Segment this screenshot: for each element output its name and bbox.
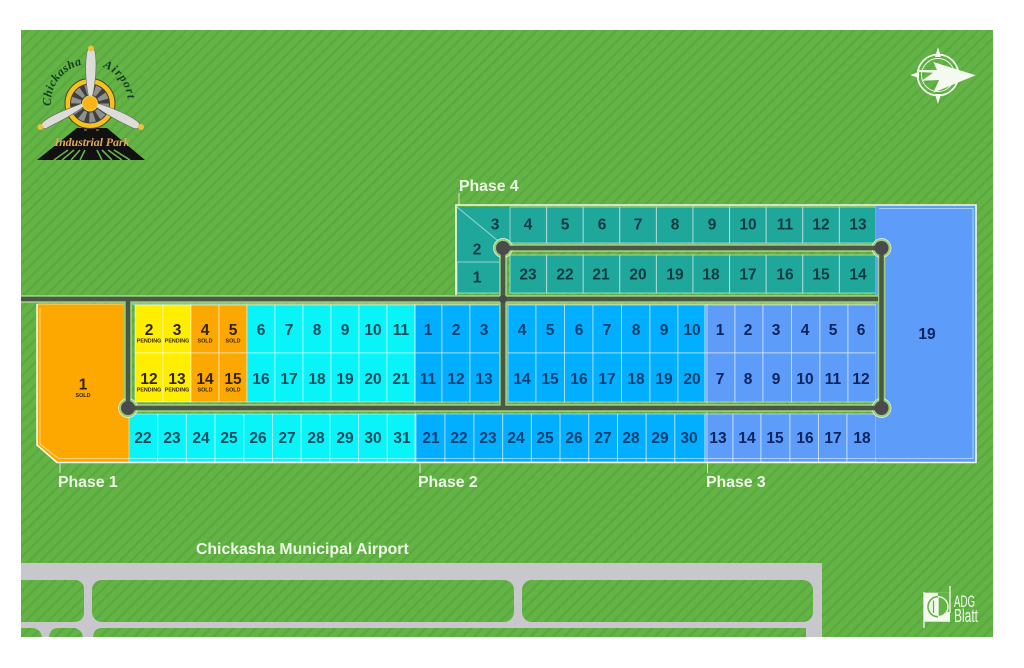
lots 4 to 10 bbox=[508, 305, 705, 353]
lots 1 to 6: 4 bbox=[801, 322, 810, 339]
lots 4 to 10: 6 bbox=[575, 322, 584, 339]
lots 16 to 21: 18 bbox=[308, 371, 326, 388]
icon: north compass bbox=[910, 47, 976, 104]
lots 22 to 31: 30 bbox=[364, 430, 382, 447]
lot 4 sold bbox=[191, 305, 219, 353]
lot 15 sold: SOLD bbox=[226, 388, 241, 394]
panel: phase 1 lots bbox=[37, 304, 416, 463]
logo text: Airport: Airport bbox=[102, 62, 134, 98]
lot 17: 17 bbox=[739, 266, 757, 284]
lot 23 bbox=[510, 255, 547, 293]
lots 4 to 10: 4 bbox=[518, 322, 527, 339]
lots 11 to 13: 13 bbox=[475, 371, 493, 388]
lots 21 to 30: 23 bbox=[479, 430, 497, 447]
lots 21 to 30: 28 bbox=[622, 430, 640, 447]
lot 23: 23 bbox=[519, 266, 537, 284]
lot 1 sold: SOLD bbox=[76, 393, 91, 399]
lots 4 to 10: 5 bbox=[546, 322, 555, 339]
lot 1 sold bbox=[37, 304, 130, 463]
lots 7 to 12: 7 bbox=[716, 371, 724, 388]
lots 22 to 31: 29 bbox=[336, 430, 354, 447]
lots 6 to 11: 10 bbox=[364, 322, 382, 339]
lot 4: 4 bbox=[524, 216, 533, 234]
lots 21 to 30: 26 bbox=[565, 430, 583, 447]
lot 15: 15 bbox=[812, 266, 830, 284]
lots 16 to 21 bbox=[247, 353, 415, 402]
lot 18: 18 bbox=[702, 266, 720, 284]
lot 11 bbox=[766, 207, 803, 243]
lot 12 pending: 12 bbox=[140, 371, 158, 388]
lot 13 pending bbox=[163, 353, 191, 402]
lots 22 to 31: 28 bbox=[307, 430, 325, 447]
lots 7 to 12 bbox=[705, 353, 876, 402]
lots 13 to 18: 14 bbox=[738, 430, 756, 447]
lot 19 bbox=[656, 255, 693, 293]
lot 12 pending: PENDING bbox=[137, 388, 161, 394]
label: phase 2: Phase 2 bbox=[418, 474, 478, 491]
lot 4 bbox=[510, 207, 547, 243]
lots 13 to 18: 17 bbox=[824, 430, 842, 447]
lot 3 pending bbox=[163, 305, 191, 353]
lots 13 to 18: 13 bbox=[709, 430, 727, 447]
lots 1 to 6: 3 bbox=[772, 322, 781, 339]
lot 14 bbox=[839, 255, 876, 293]
lots 7 to 12: 10 bbox=[796, 371, 814, 388]
lot 13 pending: PENDING bbox=[165, 388, 189, 394]
airport label: Chickasha Municipal Airport bbox=[196, 541, 409, 558]
panel: phase 4 lots bbox=[457, 207, 876, 293]
lot 4 sold: 4 bbox=[201, 322, 210, 339]
lots 14 to 20 bbox=[508, 353, 705, 402]
logo: ADG Blatt bbox=[924, 586, 978, 628]
lots 1 to 3: 2 bbox=[452, 322, 460, 339]
logo: Chickasha Airport Industrial Park bbox=[37, 46, 145, 160]
lots 14 to 20: 17 bbox=[598, 371, 616, 388]
lots 7 to 12: 11 bbox=[825, 371, 842, 388]
lots 13 to 18: 18 bbox=[853, 430, 871, 447]
lots 16 to 21: 17 bbox=[280, 371, 298, 388]
label: phase 3: Phase 3 bbox=[706, 474, 766, 491]
lot 14 sold: 14 bbox=[196, 371, 214, 388]
lots 4 to 10: 9 bbox=[660, 322, 669, 339]
lot 20: 20 bbox=[629, 266, 647, 284]
lots 6 to 11: 9 bbox=[341, 322, 350, 339]
phase boundary outlines bbox=[37, 193, 976, 473]
lots 13 to 18: 16 bbox=[796, 430, 814, 447]
lots 16 to 21: 20 bbox=[364, 371, 382, 388]
lots 4 to 10: 8 bbox=[632, 322, 641, 339]
lot 22: 22 bbox=[556, 266, 574, 284]
lot 13 pending: 13 bbox=[168, 371, 186, 388]
lot 22 bbox=[547, 255, 583, 293]
lot 7 bbox=[620, 207, 656, 243]
lot 2 pending: 2 bbox=[145, 322, 153, 339]
lots 22 to 31: 22 bbox=[134, 430, 152, 447]
lot 11: 11 bbox=[777, 216, 794, 234]
lot 8: 8 bbox=[671, 216, 680, 234]
lots 1 to 3: 1 bbox=[424, 322, 433, 339]
lots 22 to 31: 26 bbox=[249, 430, 267, 447]
lots 7 to 12: 8 bbox=[744, 371, 753, 388]
panel: phase 2 lots bbox=[415, 305, 705, 462]
lots 21 to 30 bbox=[416, 414, 705, 462]
lot 3 pending: PENDING bbox=[165, 338, 189, 344]
lots 6 to 11: 7 bbox=[285, 322, 293, 339]
lots 6 to 11: 6 bbox=[257, 322, 266, 339]
lot 5 sold: 5 bbox=[229, 322, 238, 339]
label: phase 1: Phase 1 bbox=[58, 474, 118, 491]
lot 13 bbox=[839, 207, 876, 243]
lots 11 to 13 bbox=[415, 353, 500, 402]
lot 12 pending bbox=[135, 353, 163, 402]
lot 5: 5 bbox=[561, 216, 570, 234]
lots 21 to 30: 29 bbox=[651, 430, 669, 447]
lots 21 to 30: 21 bbox=[422, 430, 440, 447]
logo text: Industrial Park: Industrial Park bbox=[54, 135, 130, 149]
lot 13: 13 bbox=[849, 216, 867, 234]
lots 21 to 30: 25 bbox=[536, 430, 554, 447]
lots 22 to 31: 24 bbox=[192, 430, 210, 447]
lot 10 bbox=[730, 207, 766, 243]
lots 14 to 20: 19 bbox=[655, 371, 673, 388]
lots 4 to 10: 7 bbox=[603, 322, 611, 339]
road network bbox=[21, 238, 891, 418]
lot 7: 7 bbox=[634, 216, 642, 234]
lots 1 to 6: 2 bbox=[744, 322, 752, 339]
lot 12: 12 bbox=[812, 216, 830, 234]
lot 5 sold: SOLD bbox=[226, 338, 241, 344]
lot 8 bbox=[656, 207, 693, 243]
lot 19: 19 bbox=[666, 266, 684, 284]
lots 1, 2 and 3 corner: 2 bbox=[473, 242, 481, 258]
icon: propeller blades bbox=[41, 48, 140, 129]
lots 1 to 3 bbox=[415, 305, 500, 353]
logo text: ADG: ADG bbox=[954, 592, 975, 611]
lots 22 to 31 bbox=[129, 414, 416, 462]
lots 6 to 11: 11 bbox=[393, 322, 410, 339]
lots 14 to 20: 20 bbox=[683, 371, 701, 388]
lots 11 to 13: 11 bbox=[420, 371, 437, 388]
lot 9 bbox=[693, 207, 730, 243]
lot 16: 16 bbox=[776, 266, 794, 284]
lots 13 to 18: 15 bbox=[766, 430, 784, 447]
lot 1 sold: 1 bbox=[79, 376, 88, 394]
lot 9: 9 bbox=[708, 216, 717, 234]
lot 18 bbox=[693, 255, 730, 293]
lot 15 bbox=[803, 255, 839, 293]
lots 1 to 6: 6 bbox=[857, 322, 866, 339]
lot 5 bbox=[547, 207, 583, 243]
lots 16 to 21: 19 bbox=[336, 371, 354, 388]
icon: radial engine bbox=[65, 78, 115, 128]
lots 21 to 30: 24 bbox=[507, 430, 525, 447]
lot 17 bbox=[730, 255, 766, 293]
lots 1, 2 and 3 corner bbox=[457, 207, 510, 293]
lot 19: 19 bbox=[918, 326, 936, 343]
lot 2 pending: PENDING bbox=[137, 338, 161, 344]
lot 19 bbox=[876, 206, 975, 462]
lots 7 to 12: 9 bbox=[772, 371, 781, 388]
lot 5 sold bbox=[219, 305, 247, 353]
lots 14 to 20: 15 bbox=[541, 371, 559, 388]
airport taxiways and runway bbox=[21, 563, 822, 637]
lot 4 sold: SOLD bbox=[198, 338, 213, 344]
panel: phase 3 lots bbox=[705, 206, 975, 462]
lots 21 to 30: 30 bbox=[680, 430, 698, 447]
icon: runway base bbox=[37, 128, 145, 160]
lots 1 to 3: 3 bbox=[480, 322, 489, 339]
lots 6 to 11: 8 bbox=[313, 322, 322, 339]
logo text: Blatt: Blatt bbox=[954, 606, 978, 626]
lots 13 to 18 bbox=[705, 414, 876, 462]
lot 2 pending bbox=[135, 305, 163, 353]
lot 21: 21 bbox=[592, 266, 610, 284]
lot 12 bbox=[803, 207, 839, 243]
lots 1, 2 and 3 corner: 3 bbox=[491, 216, 500, 234]
lots 11 to 13: 12 bbox=[447, 371, 465, 388]
lots 22 to 31: 25 bbox=[220, 430, 238, 447]
lots 1 to 6: 1 bbox=[716, 322, 725, 339]
lot 14: 14 bbox=[849, 266, 867, 284]
lots 1 to 6 bbox=[705, 305, 876, 353]
lot 14 sold: SOLD bbox=[198, 388, 213, 394]
lots 7 to 12: 12 bbox=[852, 371, 870, 388]
lots 14 to 20: 16 bbox=[570, 371, 588, 388]
lots 21 to 30: 27 bbox=[594, 430, 612, 447]
lots 14 to 20: 14 bbox=[513, 371, 531, 388]
lots 1 to 6: 5 bbox=[829, 322, 838, 339]
logo text: Chickasha: Chickasha bbox=[42, 59, 82, 106]
lots 14 to 20: 18 bbox=[627, 371, 645, 388]
lot 21 bbox=[583, 255, 620, 293]
lots 21 to 30: 22 bbox=[450, 430, 468, 447]
lot 20 bbox=[620, 255, 656, 293]
lots 16 to 21: 16 bbox=[252, 371, 270, 388]
lots 6 to 11 bbox=[247, 305, 415, 353]
icon: blade tips bbox=[38, 46, 144, 130]
lot 6: 6 bbox=[598, 216, 607, 234]
lot 3 pending: 3 bbox=[173, 322, 182, 339]
lots 22 to 31: 23 bbox=[163, 430, 181, 447]
lot 10: 10 bbox=[739, 216, 757, 234]
lots 4 to 10: 10 bbox=[683, 322, 701, 339]
icon: hub bbox=[82, 96, 98, 111]
label: phase 4: Phase 4 bbox=[459, 178, 519, 195]
lot 14 sold bbox=[191, 353, 219, 402]
lot 16 bbox=[766, 255, 803, 293]
lots 16 to 21: 21 bbox=[392, 371, 410, 388]
lot 15 sold: 15 bbox=[224, 371, 242, 388]
lots 1, 2 and 3 corner: 1 bbox=[473, 270, 482, 286]
lot 6 bbox=[583, 207, 620, 243]
lots 22 to 31: 27 bbox=[278, 430, 296, 447]
lot 15 sold bbox=[219, 353, 247, 402]
lots 22 to 31: 31 bbox=[393, 430, 411, 447]
